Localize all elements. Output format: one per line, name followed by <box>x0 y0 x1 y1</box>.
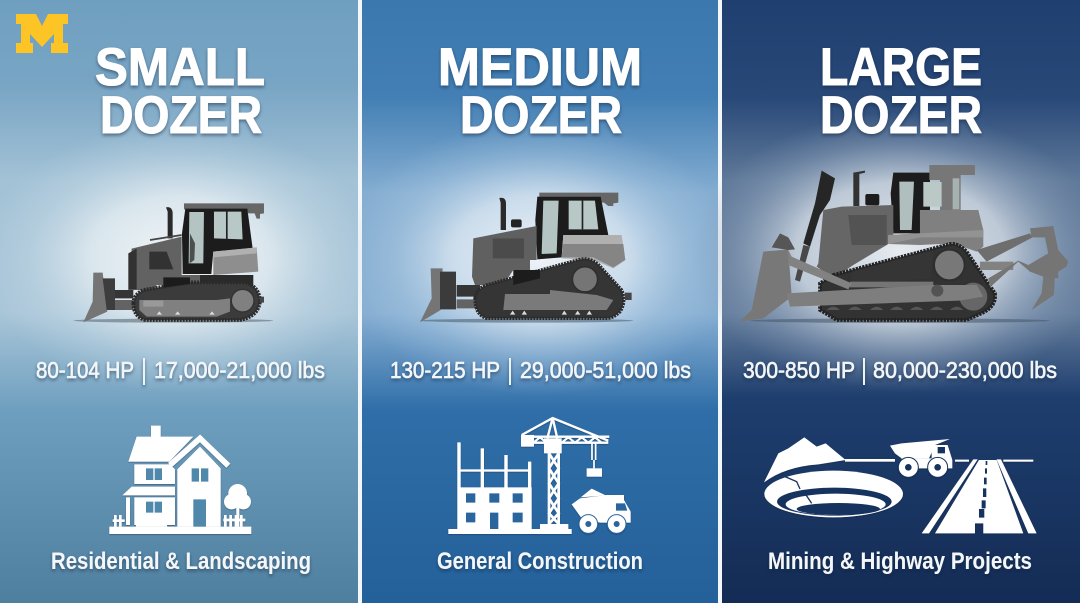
specs: large dozer: 80,000-230,000 lbs <box>873 357 1057 383</box>
large dozer illustration <box>740 165 1068 323</box>
backlight glow <box>0 123 380 393</box>
title: large dozer <box>820 38 982 145</box>
backlight glow <box>690 112 1080 392</box>
divider: left <box>358 0 362 603</box>
title: small dozer: SMALL <box>95 38 265 97</box>
title: medium dozer: DOZER <box>460 86 622 145</box>
title: medium dozer <box>438 38 642 145</box>
panel: large dozer <box>690 0 1080 603</box>
specs: small dozer: 17,000-21,000 lbs <box>154 357 325 383</box>
panel background <box>0 0 358 603</box>
title: large dozer: DOZER <box>820 86 982 145</box>
medium dozer illustration <box>420 193 633 323</box>
label: residential and landscaping: Residential & Landscaping <box>51 548 311 575</box>
panel: small dozer <box>0 0 380 603</box>
specs: medium dozer <box>390 357 691 385</box>
icon: construction site <box>448 418 631 534</box>
title: medium dozer: MEDIUM <box>438 38 642 97</box>
label: mining and highway projects: Mining & Highway Projects <box>768 548 1032 575</box>
label: general construction: General Construction <box>437 548 643 575</box>
specs: small dozer <box>36 357 325 385</box>
icon: house <box>109 426 251 534</box>
specs: small dozer: 80-104 HP <box>36 357 134 383</box>
panel background <box>722 0 1080 603</box>
icon: mine, haul truck and highway <box>764 437 1037 533</box>
title: small dozer: DOZER <box>100 86 262 145</box>
backlight glow <box>340 120 740 396</box>
specs: large dozer: 300-850 HP <box>743 357 855 383</box>
specs: large dozer <box>743 357 1057 385</box>
specs: medium dozer: 29,000-51,000 lbs <box>520 357 691 383</box>
panel: medium dozer <box>340 0 740 603</box>
title: small dozer <box>95 38 265 145</box>
small dozer illustration <box>73 203 273 323</box>
panel background <box>362 0 718 603</box>
title: large dozer: LARGE <box>820 38 982 97</box>
specs: medium dozer: 130-215 HP <box>390 357 500 383</box>
logo: block M <box>16 14 68 53</box>
divider: right <box>718 0 722 603</box>
